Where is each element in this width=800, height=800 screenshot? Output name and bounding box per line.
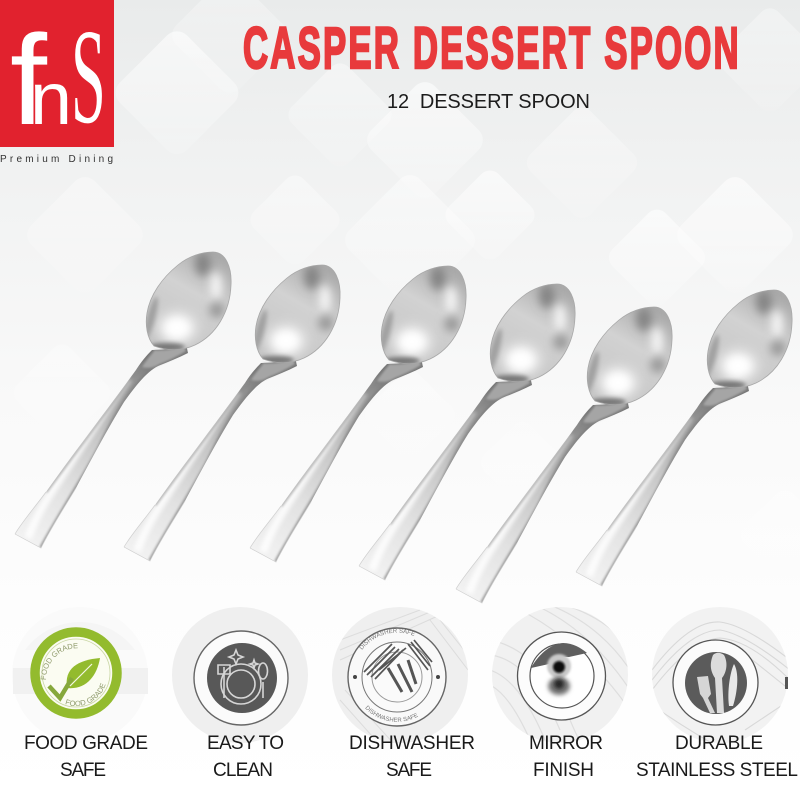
label: dishwasher safe: DISHWASHER [349, 733, 475, 754]
logo: FnS Premium Dining [0, 0, 114, 165]
label: durable stainless steel: DURABLE [675, 733, 763, 754]
feature: durable stainless steel [636, 607, 798, 781]
spoon 1 [15, 252, 231, 548]
label: food grade safe: SAFE [60, 760, 106, 781]
icon: cutlery [652, 607, 790, 745]
subtitle: 12 DESSERT SPOON [387, 91, 590, 113]
feature: mirror finish [490, 605, 630, 781]
label: durable stainless steel: STAINLESS STEEL [636, 760, 798, 781]
label: mirror finish: MIRROR [529, 733, 603, 754]
label: dishwasher safe: SAFE [386, 760, 432, 781]
label: mirror finish: FINISH [533, 760, 594, 781]
icon: food grade badge: FOOD GRADE [66, 682, 106, 706]
icon: mirror spheres [492, 607, 628, 743]
label: dishwasher safe [349, 733, 475, 781]
icon: dishwasher badge: DISHWASHER SAFE [359, 628, 416, 650]
spoon 2 [124, 265, 340, 561]
spoon 5 [456, 307, 672, 603]
label: easy to clean [207, 733, 284, 781]
icon: dishwasher badge: DISHWASHER SAFE [365, 705, 418, 722]
feature: dishwasher safe [332, 607, 475, 781]
icon: food grade badge [13, 622, 148, 719]
label: food grade safe [24, 733, 148, 781]
icon: food grade badge: FOOD GRADE [40, 643, 78, 680]
feature: easy to clean [172, 607, 308, 781]
spoon 4 [359, 284, 575, 580]
label: mirror finish [529, 733, 603, 781]
label: food grade safe: FOOD GRADE [24, 733, 148, 754]
spoon 6 [576, 290, 792, 586]
title: CASPER DESSERT SPOON [243, 17, 739, 81]
feature: food grade safe [13, 622, 148, 781]
label: easy to clean: EASY TO [207, 733, 284, 754]
logo: FnS Premium Dining: n [30, 57, 72, 140]
spoon 3 [250, 266, 466, 562]
label: durable stainless steel [636, 733, 798, 781]
logo: FnS Premium Dining: S [71, 1, 106, 152]
label: easy to clean: CLEAN [213, 760, 273, 781]
icon: dishwasher badge [332, 607, 468, 743]
icon: clean plate [172, 607, 308, 743]
stray mark at right edge [785, 677, 788, 689]
logo: FnS Premium Dining: Premium Dining [0, 154, 113, 165]
logo: FnS Premium Dining: f [10, 9, 47, 152]
